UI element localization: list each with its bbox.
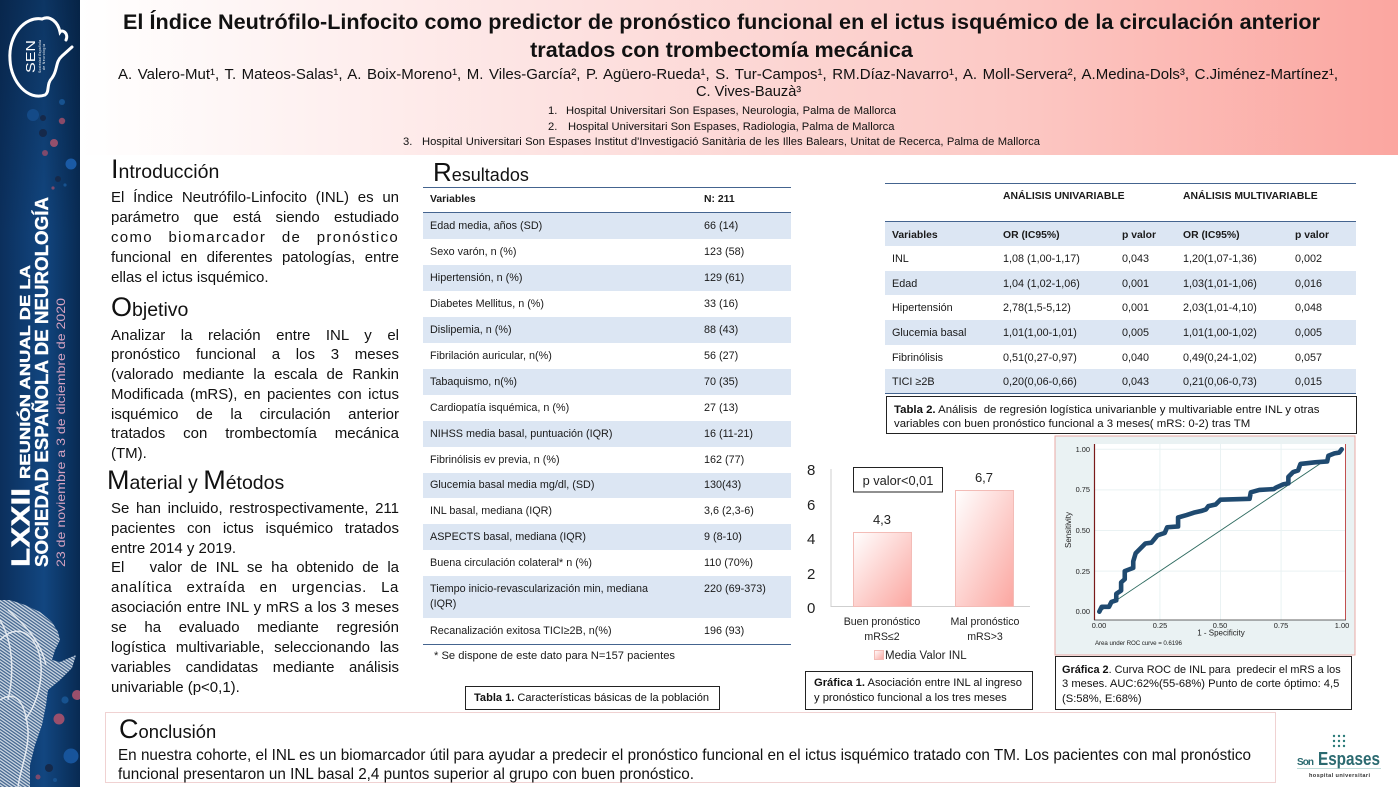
row: Fibrinólisis: 0,49(0,24-1,02) [1183, 352, 1257, 364]
axis labels: 0.50 [1076, 526, 1090, 535]
sidebar banner [0, 0, 80, 787]
caption: gráfica 1: Gráfica 1. Asociación entre INL al ingreso [814, 677, 1022, 689]
row: fibrinólisis [430, 454, 744, 466]
caption: gráfica 2: (S:58%, E:68%) [1062, 693, 1142, 705]
heading: material y métodos: Material y Métodos [107, 465, 284, 495]
affiliations: 1. [548, 105, 557, 117]
ROC curve chart [1054, 436, 1356, 656]
row: nihss: NIHSS media basal, puntuación (IQR) [430, 428, 612, 440]
category labels: Buen pronóstico [844, 616, 920, 628]
text: conclusión: funcional presentaron un INL basal 2,4 puntos superior al grupo con buen pronóstico. [118, 766, 694, 783]
y axis labels [807, 462, 815, 617]
caption: gráfica 2: Gráfica 2. Curva ROC de INL para predecir el mRS a los [1062, 664, 1341, 676]
category labels: mRS≤2 [864, 631, 900, 643]
text: introducción: como biomarcador de pronóstico [111, 229, 399, 246]
text: objetivo: isquémico de la circulación anterior [111, 406, 399, 423]
reference diagonal [1099, 449, 1342, 612]
text: material y métodos: variables candidatas mediante análisis [111, 659, 399, 676]
text: meeting title: LXXII [6, 488, 36, 567]
text: objetivo [111, 327, 399, 462]
axis labels: 0.00 [1076, 607, 1090, 616]
row: Fibrinólisis: 0,51(0,27-0,97) [1003, 352, 1077, 364]
affiliations: Hospital Universitari Son Espases, Radiologia, Palma de Mallorca [568, 121, 894, 133]
row: tiempo: Tiempo inicio-revascularización min, mediana [430, 583, 648, 595]
caption: tabla 2: variables con buen pronóstico funcional a 3 meses( mRS: 0-2) tras TM [894, 418, 1250, 430]
axis labels: Area under ROC curve = 0.6196 [1095, 640, 1183, 647]
row: Hipertensión: 2,78(1,5-5,12) [1003, 302, 1071, 314]
annotation: p valor [854, 468, 942, 492]
row: Hipertensión: 0,001 [1122, 302, 1149, 314]
text: introducción: funcional en diferentes patologías, entre [111, 249, 399, 266]
text: introducción [111, 189, 399, 286]
table header [423, 188, 791, 213]
row: Glucemia: 0,005 [1122, 327, 1149, 339]
row: Glucemia: 1,01(1,00-1,02) [1183, 327, 1257, 339]
icon: lower network dots [36, 690, 82, 782]
affiliations: 2. [548, 121, 557, 133]
category labels: Mal pronóstico [951, 616, 1020, 628]
row: sexo: 123 (58) [704, 246, 744, 258]
row: INL: INL [892, 253, 909, 265]
category labels: mRS>3 [967, 631, 1003, 643]
bar: buen pronóstico [854, 532, 912, 606]
caption: gráfica 2 [1055, 656, 1352, 710]
row: Glucemia: Glucemia basal [892, 327, 966, 339]
row: dislipemia: Dislipemia, n (%) [430, 324, 512, 336]
icon: decorative network dots [27, 99, 76, 190]
text: material y métodos: analítica extraída en urgencias. La [111, 579, 399, 596]
caption: gráfica 1 [805, 671, 1033, 710]
logo: Son Espases: hospital universitari [1309, 773, 1370, 779]
row: aspects: 9 (8-10) [704, 531, 742, 543]
row: tabaquismo: 70 (35) [704, 376, 738, 388]
table 1: characteristics [423, 187, 791, 645]
row: Fibrinólisis [892, 352, 1322, 364]
text: material y métodos: Se han incluido, restrospectivamente, 211 [111, 500, 399, 517]
row: fibrinólisis: 162 (77) [704, 454, 744, 466]
authors [118, 66, 1338, 100]
affiliations: Hospital Universitari Son Espases Institut d'Investigació Sanitària de les Illes Balears, Unitat de Recerca, Palma de Mallorca [422, 136, 1040, 148]
column header: Variables [892, 230, 938, 241]
panel: objetivo [111, 292, 399, 462]
row: hipertensión: 129 (61) [704, 272, 744, 284]
affiliations: Hospital Universitari Son Espases, Neurologia, Palma de Mallorca [566, 105, 896, 117]
row: Glucemia [885, 320, 1356, 345]
caption: tabla 2: Tabla 2. Análisis de regresión logística univarianble y multivariable entre INL y otras [894, 404, 1319, 416]
logo: SEN: SEN [23, 40, 38, 73]
authors: A. Valero-Mut¹, T. Mateos-Salas¹, A. Boix-Moreno¹, M. Viles-García², P. Agüero-Rueda¹, S. Tur-Campos¹, RM.Díaz-Navarro¹, A. Moll-Servera², A.Medina-Dols³, C.Jiménez-Martínez¹, [118, 66, 1338, 83]
row: INL [892, 253, 1322, 265]
caption: gráfica 1: y pronóstico funcional a los tres meses [814, 692, 1007, 704]
row: circulación colateral: Buena circulación colateral* n (%) [430, 557, 592, 569]
text: objetivo: Modificada (mRS), en pacientes con ictus [111, 386, 399, 403]
column header: OR (IC95%) [1183, 230, 1240, 241]
heading: objetivo: Objetivo [111, 292, 188, 322]
logo: Son Espases: Son [1297, 757, 1314, 768]
row: Fibrinólisis: Fibrinólisis [892, 352, 943, 364]
row: nihss [423, 421, 791, 447]
row: INL: 0,043 [1122, 253, 1149, 265]
axis labels: 0.25 [1153, 621, 1167, 630]
column header: OR (IC95%) [1003, 230, 1060, 241]
row: recanalización: 196 (93) [704, 625, 744, 637]
row: sexo [430, 246, 744, 258]
y axis labels: 0 [807, 600, 815, 617]
axis labels: 0.25 [1076, 567, 1090, 576]
row: dislipemia: 88 (43) [704, 324, 738, 336]
authors: C. Vives-Bauzà³ [696, 84, 801, 100]
text: objetivo: tratados con trombectomía mecánica [111, 425, 399, 442]
row: circulación colateral [430, 557, 753, 569]
heading: resultados: Resultados [433, 157, 529, 187]
row: diabetes [430, 298, 738, 310]
row: Fibrinólisis: 0,040 [1122, 352, 1149, 364]
row: Edad: 1,03(1,01-1,06) [1183, 278, 1257, 290]
row: TICI: TICI ≥2B [892, 376, 935, 388]
axis labels: 1 - Specificity [1197, 628, 1245, 638]
text: meeting title [6, 197, 52, 567]
row: Edad: 0,016 [1295, 278, 1322, 290]
row: cardiopatía [430, 402, 738, 414]
logo: SEN: Sociedad Española [38, 40, 42, 73]
row: Hipertensión: Hipertensión [892, 302, 953, 314]
row: circulación colateral: 110 (70%) [704, 557, 753, 569]
row: inl: INL basal, mediana (IQR) [430, 505, 552, 517]
text: objetivo: Analizar la relación entre INL y el [111, 327, 399, 344]
row: INL: 1,20(1,07-1,36) [1183, 253, 1257, 265]
row: Edad: 0,001 [1122, 278, 1149, 290]
row: hipertensión: Hipertensión, n (%) [430, 272, 522, 284]
row: TICI: 0,21(0,06-0,73) [1183, 376, 1257, 388]
group header: ANÁLISIS MULTIVARIABLE [1183, 191, 1318, 202]
plot area [1094, 444, 1346, 620]
row: Glucemia: 1,01(1,00-1,01) [1003, 327, 1077, 339]
axis labels: 0.75 [1076, 485, 1090, 494]
text: conclusión: En nuestra cohorte, el INL es un biomarcador útil para ayudar a predecir el pronóstico funcional en el ictus isquémico tratado con TM. Los pacientes con mal pronóstico [118, 747, 1251, 764]
row: nihss: 16 (11-21) [704, 428, 753, 440]
value labels: 4,3 [873, 512, 891, 527]
title: El Índice Neutrófilo-Linfocito como predictor de pronóstico funcional en el ictus isquémico de la circulación anterior [123, 9, 1320, 34]
y axis labels: 6 [807, 497, 815, 514]
text: introducción: parámetro que está siendo estudiado [111, 209, 399, 226]
text: meeting title: REUNIÓN ANUAL DE LA [16, 264, 34, 479]
row: INL: 1,08 (1,00-1,17) [1003, 253, 1080, 265]
axis labels: Sensitivity [1064, 512, 1073, 548]
legend: Media Valor INL [885, 650, 967, 662]
row: recanalización [430, 625, 744, 637]
row: sexo: Sexo varón, n (%) [430, 246, 516, 258]
row: fibrilación [430, 350, 738, 362]
text: objetivo: pronóstico funcional a los 3 meses [111, 346, 399, 363]
table 2: logistic regression [885, 183, 1356, 394]
heading: conclusión: Conclusión [119, 714, 216, 744]
row: Edad: Edad [892, 278, 917, 290]
bar chart: INL by prognosis [807, 462, 1030, 662]
row: tiempo: (IQR) [430, 598, 456, 610]
text: material y métodos: pacientes con ictus isquémico tratados [111, 520, 399, 537]
row: diabetes: 33 (16) [704, 298, 738, 310]
row: Hipertensión: 2,03(1,01-4,10) [1183, 302, 1257, 314]
column header [885, 222, 1356, 246]
caption: gráfica 2: 3 meses. AUC:62%(55-68%) Punto de corte óptimo: 4,5 [1062, 678, 1339, 690]
text: material y métodos: El valor de INL se ha obtenido de la [111, 559, 399, 576]
row: TICI: 0,20(0,06-0,66) [1003, 376, 1077, 388]
row: diabetes: Diabetes Mellitus, n (%) [430, 298, 544, 310]
logo: SEN: de Neurología [42, 44, 46, 70]
group header: ANÁLISIS UNIVARIABLE [1003, 191, 1125, 202]
title: tratados con trombectomía mecánica [530, 37, 913, 62]
text: material y métodos: se ha evaluado mediante regresión [111, 619, 399, 636]
row: glucemia: 130(43) [704, 479, 741, 491]
row: aspects: ASPECTS basal, mediana (IQR) [430, 531, 586, 543]
illustration: brain mesh [0, 600, 76, 787]
affiliations: 3. [403, 136, 412, 148]
row: hipertensión [423, 265, 791, 291]
footnote: * Se dispone de este dato para N=157 pacientes [434, 650, 675, 662]
logo: SEN [10, 18, 72, 96]
value labels [873, 470, 993, 527]
text: introducción: ellas el ictus isquémico. [111, 269, 269, 286]
column header: p valor [1122, 230, 1156, 241]
column header: p valor [1295, 230, 1329, 241]
axis labels: 0.00 [1092, 621, 1106, 630]
axis labels: 0.75 [1274, 621, 1288, 630]
bar: mal pronóstico [956, 490, 1014, 606]
row: TICI: 0,015 [1295, 376, 1322, 388]
row: glucemia: Glucemia basal media mg/dl, (SD) [430, 479, 594, 491]
row: dislipemia [423, 317, 791, 343]
row: fibrinólisis: Fibrinólisis ev previa, n (%) [430, 454, 560, 466]
group header [885, 184, 1356, 222]
row: Edad: 1,04 (1,02-1,06) [1003, 278, 1080, 290]
row: TICI [885, 369, 1356, 393]
y axis labels: 2 [807, 566, 815, 583]
text: material y métodos: univariable (p<0,1). [111, 679, 240, 696]
y axis labels: 4 [807, 531, 815, 548]
row: Edad [885, 271, 1356, 295]
row: fibrilación: Fibrilación auricular, n(%) [430, 350, 552, 362]
row: cardiopatía: Cardiopatía isquémica, n (%) [430, 402, 569, 414]
row: tabaquismo [423, 369, 791, 395]
row: tabaquismo: Tabaquismo, n(%) [430, 376, 517, 388]
caption: tabla 2 [886, 396, 1357, 434]
text: objetivo: (valorado mediante la escala de Rankin [111, 366, 399, 383]
header band [80, 0, 1398, 155]
text: objetivo: (TM). [111, 445, 147, 462]
text: meeting title: SOCIEDAD ESPAÑOLA DE NEUROLOGÍA [31, 197, 52, 567]
text: meeting dates: 23 de noviembre a 3 de diciembre de 2020 [54, 298, 68, 567]
row: cardiopatía: 27 (13) [704, 402, 738, 414]
text: material y métodos: entre 2014 y 2019. [111, 540, 236, 557]
value labels: 6,7 [975, 470, 993, 485]
row: inl: 3,6 (2,3-6) [704, 505, 754, 517]
axis labels [1064, 445, 1349, 647]
heading: introducción: Introducción [111, 154, 219, 184]
caption: tabla 1: Tabla 1. Características básicas de la población [474, 692, 709, 704]
row: Hipertensión: 0,048 [1295, 302, 1322, 314]
text: material y métodos: asociación entre INL y mRS a los 3 meses [111, 599, 399, 616]
panel: material y métodos [107, 465, 399, 696]
axis labels: 1.00 [1076, 445, 1090, 454]
row: inl [430, 505, 754, 517]
panel: introducción [111, 154, 399, 286]
axis labels: 1.00 [1335, 621, 1349, 630]
panel: conclusión [105, 712, 1276, 783]
ROC curve line [1099, 449, 1342, 612]
row: tiempo [423, 576, 791, 618]
axis labels: 0.50 [1213, 621, 1227, 630]
text: material y métodos: logística multivariable, seleccionando las [111, 639, 399, 656]
row: Fibrinólisis: 0,057 [1295, 352, 1322, 364]
text: material y métodos [111, 500, 399, 696]
logo: Son Espases [1297, 734, 1381, 779]
text: conclusión [118, 747, 1251, 783]
table header: Variables [430, 194, 476, 205]
affiliations [403, 105, 1040, 148]
caption: tabla 1 [465, 686, 720, 710]
row: INL: 0,002 [1295, 253, 1322, 265]
row: tiempo: 220 (69-373) [704, 583, 766, 595]
row: TICI: 0,043 [1122, 376, 1149, 388]
table header: N: 211 [704, 194, 735, 205]
row: Hipertensión [892, 302, 1322, 314]
title [123, 9, 1320, 62]
annotation: p valor: p valor<0,01 [863, 473, 933, 488]
row: edad: 66 (14) [704, 220, 738, 232]
row: Glucemia: 0,005 [1295, 327, 1322, 339]
row: recanalización: Recanalización exitosa TICI≥2B, n(%) [430, 625, 612, 637]
row: fibrilación: 56 (27) [704, 350, 738, 362]
row: glucemia [423, 473, 791, 498]
y axis labels: 8 [807, 462, 815, 479]
text: introducción: El Índice Neutrófilo-Linfocito (INL) es un [111, 189, 399, 206]
category labels [844, 616, 1020, 643]
row: edad: Edad media, años (SD) [430, 220, 542, 232]
row: edad [423, 213, 791, 239]
row: aspects [423, 524, 791, 550]
